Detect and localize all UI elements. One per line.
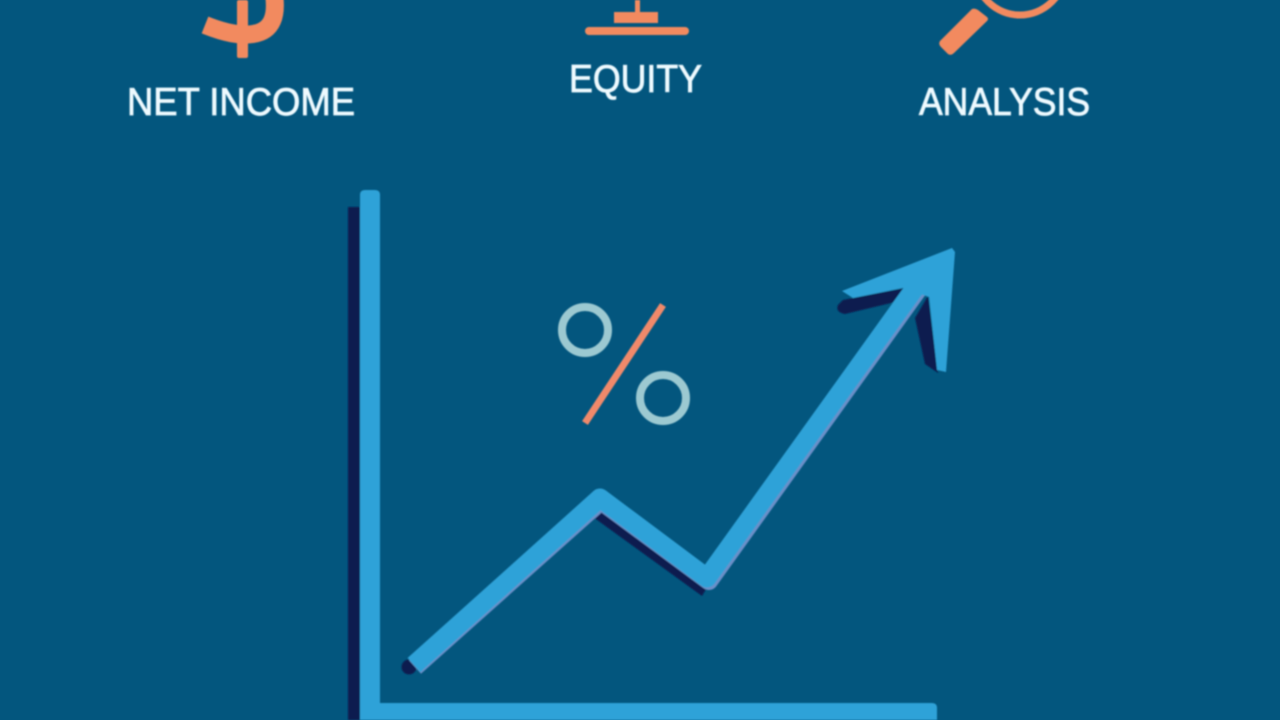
label: net income: NET INCOME [127,81,355,124]
arrow shadow [402,288,938,674]
icon: dollar sign [205,0,275,58]
icon: magnifying glass [939,0,1065,55]
chart axes [348,190,937,720]
arrow edge [415,280,925,667]
label: equity: EQUITY [569,58,702,101]
percent symbol [562,305,686,423]
icon: gavel block [585,0,689,35]
arrow head [842,248,955,372]
arrow line [414,270,928,665]
label: analysis: ANALYSIS [919,81,1090,124]
rising trend arrow [402,248,955,674]
